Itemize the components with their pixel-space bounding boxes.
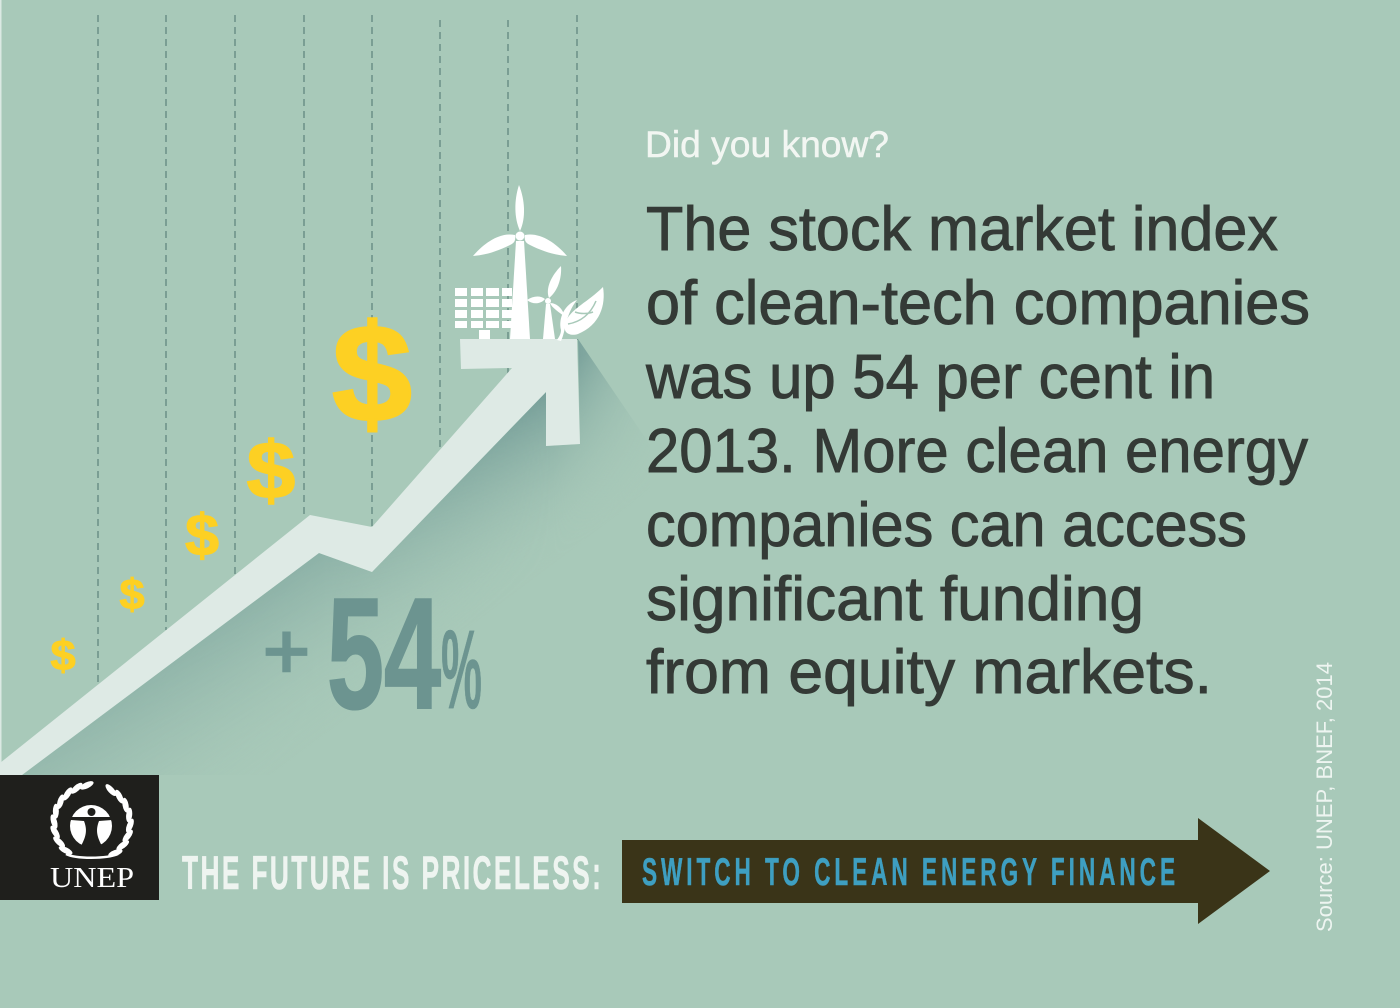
banner arrow [622, 818, 1270, 924]
main text block: 2013. More clean energy [646, 417, 1308, 486]
icon: large wind turbine [473, 185, 567, 339]
stat: +54%: + [263, 607, 310, 695]
main text block: significant funding [646, 565, 1144, 634]
icon: laurel wreath [49, 779, 135, 858]
icon: dollar signs: $ [50, 632, 76, 680]
icon: dollar signs [50, 297, 412, 680]
icon: globe and figure [70, 805, 112, 848]
icon: solar panel [455, 288, 512, 339]
icon: dollar signs: $ [332, 297, 412, 450]
stat: +54%: 54 [327, 566, 441, 742]
UNEP logo block [0, 775, 159, 900]
main text block: companies can access [646, 491, 1247, 560]
arrow shadow [22, 339, 650, 775]
heading: did you know: Did you know? [645, 124, 889, 165]
stat: +54% [263, 566, 482, 742]
main text block: from equity markets. [646, 638, 1212, 707]
icon: small wind turbine [527, 266, 565, 339]
icon: dollar signs: $ [247, 425, 295, 515]
icon: dollar signs: $ [119, 571, 145, 619]
tagline: THE FUTURE IS PRICELESS: [182, 848, 601, 900]
main text block: of clean-tech companies [646, 269, 1310, 338]
rising arrow [0, 339, 580, 775]
icon: leaves [557, 287, 604, 341]
infographic canvas: % [441, 607, 482, 732]
source note: Source: UNEP, BNEF, 2014 [1312, 662, 1337, 932]
dashed gridlines [98, 15, 577, 686]
main text block: The stock market index [646, 195, 1278, 264]
icon: dollar signs: $ [185, 502, 219, 568]
main text block [645, 195, 1310, 707]
banner text: SWITCH TO CLEAN ENERGY FINANCE [642, 850, 1175, 894]
logo wordmark: UNEP [50, 862, 134, 894]
icon: clean energy cluster [455, 185, 604, 341]
main text block: was up 54 per cent in [645, 343, 1215, 412]
